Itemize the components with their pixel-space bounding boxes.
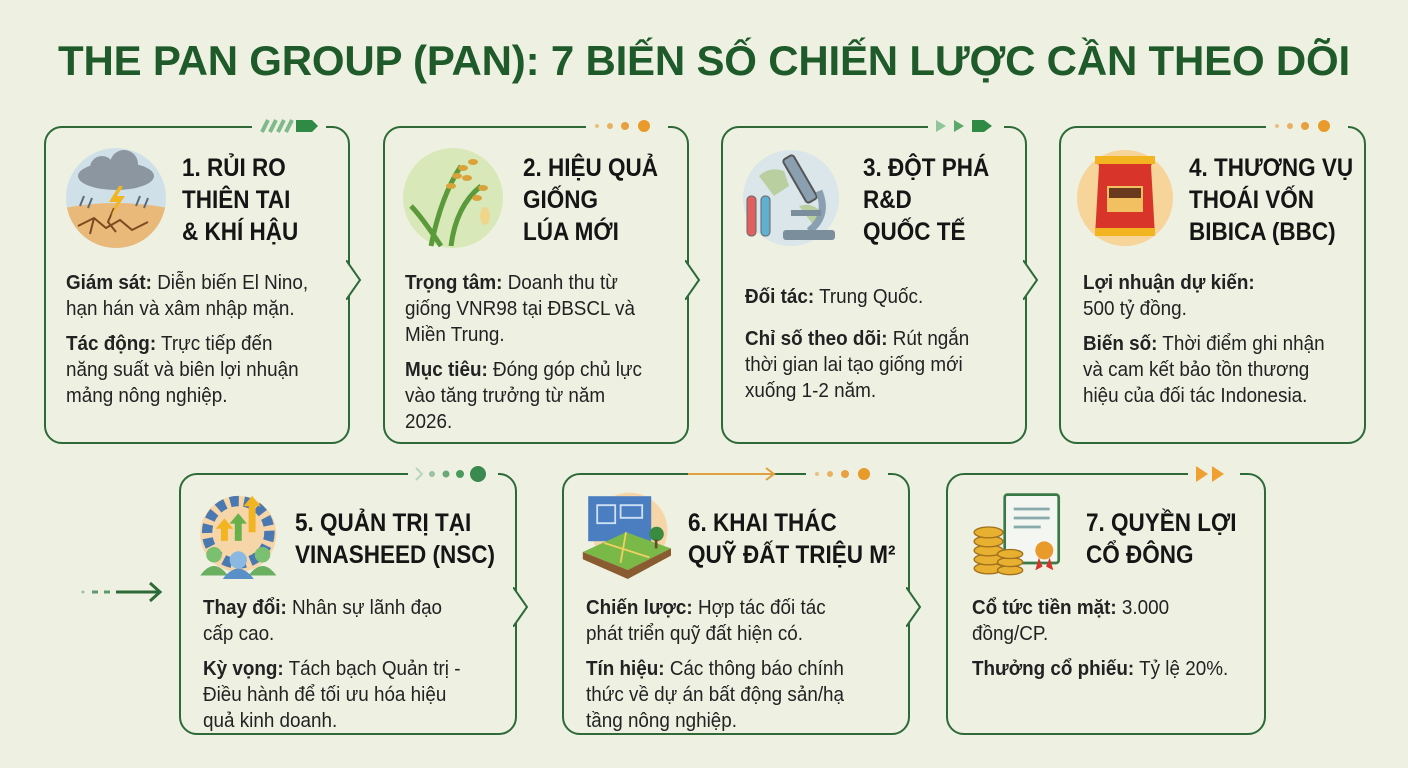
- arrow notch: [1023, 260, 1038, 300]
- text 3: thời gian lai tạo giống mới: [745, 353, 963, 376]
- panel: card 4: [1059, 126, 1366, 444]
- text 2: vào tăng trưởng từ năm: [405, 384, 605, 407]
- heading 1: & KHÍ HẬU: [182, 218, 298, 246]
- heading 6: [688, 508, 895, 569]
- text 5: [203, 596, 460, 732]
- text 7: Thưởng cổ phiếu: Tỷ lệ 20%.: [972, 657, 1228, 680]
- text 6: Chiến lược: Hợp tác đối tác: [586, 596, 826, 619]
- text 4: 500 tỷ đồng.: [1083, 297, 1187, 320]
- heading 2: LÚA MỚI: [523, 218, 619, 246]
- heading 3: R&D: [863, 186, 912, 214]
- text 5: cấp cao.: [203, 622, 274, 645]
- text 2: 2026.: [405, 410, 452, 433]
- heading 7: 7. QUYỀN LỢI: [1086, 509, 1236, 537]
- text 6: tầng nông nghiệp.: [586, 709, 737, 732]
- deco 6b: [806, 464, 888, 484]
- panel: card 5: [179, 473, 517, 735]
- heading 1: THIÊN TAI: [182, 186, 290, 214]
- arrow notch: [346, 260, 362, 300]
- deco 4: [1266, 118, 1348, 134]
- heading 2: 2. HIỆU QUẢ: [523, 154, 658, 182]
- text 3: Đối tác: Trung Quốc.: [745, 285, 923, 308]
- heading 4: [1189, 154, 1353, 246]
- text 4: hiệu của đối tác Indonesia.: [1083, 384, 1307, 407]
- text 3: [745, 285, 969, 402]
- text 5: quả kinh doanh.: [203, 709, 337, 732]
- panel: card 1: [44, 126, 350, 444]
- title: THE PAN GROUP (PAN): 7 BIẾN SỐ CHIẾN LƯỢC CẦN THEO DÕI: [58, 37, 1350, 84]
- text 1: [66, 271, 308, 407]
- heading 3: QUỐC TẾ: [863, 218, 966, 246]
- text 2: Mục tiêu: Đóng góp chủ lực: [405, 358, 642, 381]
- heading 4: BIBICA (BBC): [1189, 218, 1336, 246]
- deco 6: [688, 467, 776, 481]
- panel: card 3: [721, 126, 1027, 444]
- icon: governance: [200, 496, 276, 579]
- arrow: into row 2: [82, 582, 162, 602]
- heading 4: THOÁI VỐN: [1189, 186, 1314, 214]
- heading 5: [295, 508, 495, 569]
- text 5: Điều hành để tối ưu hóa hiệu: [203, 683, 446, 706]
- deco 3: [928, 118, 1004, 134]
- text 6: Tín hiệu: Các thông báo chính: [586, 657, 844, 680]
- text 5: Kỳ vọng: Tách bạch Quản trị -: [203, 657, 460, 680]
- text 1: Tác động: Trực tiếp đến: [66, 332, 273, 355]
- text 5: Thay đổi: Nhân sự lãnh đạo: [203, 596, 442, 619]
- text 1: Giám sát: Diễn biến El Nino,: [66, 271, 308, 294]
- text 2: giống VNR98 tại ĐBSCL và: [405, 297, 635, 320]
- text 3: Chỉ số theo dõi: Rút ngắn: [745, 327, 969, 350]
- text 6: [586, 596, 844, 732]
- arrow notch: [685, 260, 700, 300]
- deco 1: [252, 118, 326, 134]
- heading 6: QUỸ ĐẤT TRIỆU M²: [688, 541, 895, 569]
- deco 7: [1188, 464, 1240, 484]
- heading 6: 6. KHAI THÁC: [688, 509, 837, 537]
- deco 5: [408, 464, 498, 484]
- text 7: [972, 596, 1228, 680]
- text 1: năng suất và biên lợi nhuận: [66, 358, 299, 381]
- text 1: mảng nông nghiệp.: [66, 384, 227, 407]
- heading 2: GIỐNG: [523, 186, 598, 214]
- text 4: và cam kết bảo tồn thương: [1083, 358, 1309, 381]
- heading 7: [1086, 508, 1236, 569]
- text 7: đồng/CP.: [972, 622, 1048, 645]
- text 2: [405, 271, 642, 433]
- text 7: Cổ tức tiền mặt: 3.000: [972, 596, 1169, 619]
- text 4: Lợi nhuận dự kiến:: [1083, 271, 1255, 294]
- arrow notch: [906, 587, 922, 627]
- deco 2: [586, 118, 668, 134]
- heading 3: [863, 153, 989, 246]
- text 2: Trọng tâm: Doanh thu từ: [405, 271, 618, 294]
- text 4: Biến số: Thời điểm ghi nhận: [1083, 332, 1325, 355]
- heading 5: VINASHEED (NSC): [295, 541, 495, 569]
- icon: snack bag: [1077, 150, 1173, 246]
- icon: storm: [66, 148, 166, 248]
- panel: card 6: [562, 473, 910, 735]
- icon: microscope: [743, 150, 839, 246]
- text 2: Miền Trung.: [405, 323, 505, 346]
- icon: land plan: [582, 492, 671, 579]
- heading 1: 1. RỦI RO: [182, 154, 286, 182]
- icon: coins & certificate: [973, 493, 1060, 576]
- panel: card 7: [946, 473, 1266, 735]
- text 3: xuống 1-2 năm.: [745, 379, 876, 402]
- text 6: thức về dự án bất động sản/hạ: [586, 683, 844, 706]
- panel: card 2: [383, 126, 689, 444]
- text 4: [1083, 271, 1325, 407]
- heading 4: 4. THƯƠNG VỤ: [1189, 154, 1353, 182]
- icon: rice: [403, 148, 503, 248]
- heading 1: [182, 153, 298, 246]
- text 1: hạn hán và xâm nhập mặn.: [66, 297, 295, 320]
- text 6: phát triển quỹ đất hiện có.: [586, 622, 803, 645]
- heading 5: 5. QUẢN TRỊ TẠI: [295, 509, 471, 537]
- heading 7: CỔ ĐÔNG: [1086, 541, 1194, 569]
- arrow notch: [513, 587, 528, 627]
- heading 3: 3. ĐỘT PHÁ: [863, 154, 989, 182]
- heading 2: [523, 154, 658, 246]
